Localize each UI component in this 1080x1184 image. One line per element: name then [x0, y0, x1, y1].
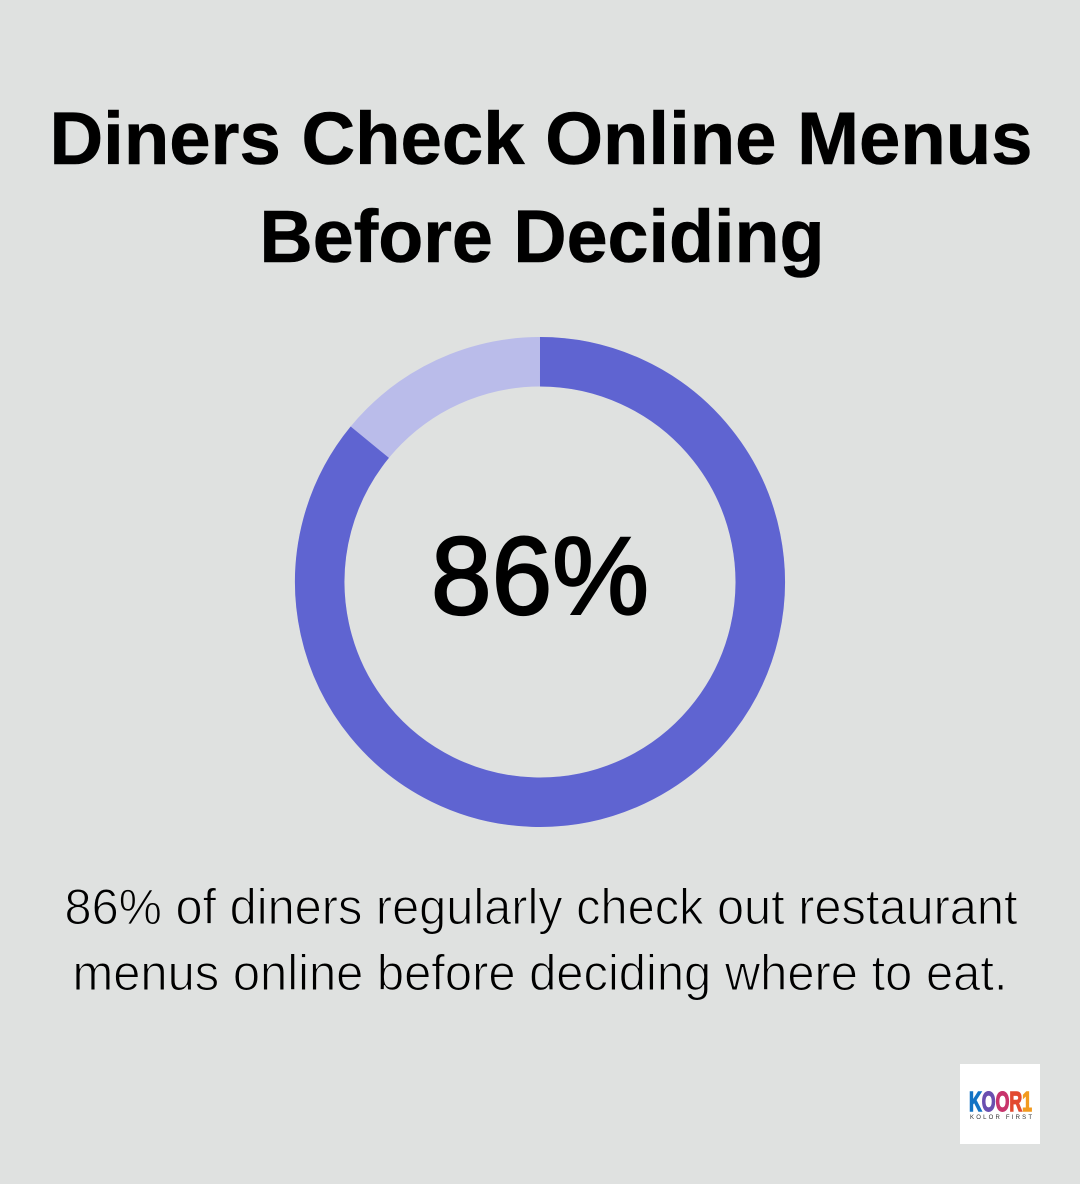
title: Diners Check Online Menus [50, 97, 1032, 180]
description text: menus online before deciding where to eat. [72, 945, 1008, 1001]
logo: Koori Kolor First: KOLOR FIRST [970, 1115, 1032, 1121]
center value: 86%: 86% [431, 515, 649, 638]
title: Before Deciding [260, 195, 824, 278]
description text: 86% of diners regularly check out restaurant [64, 879, 1018, 935]
donut chart: 86% [320, 362, 760, 802]
title [50, 97, 1032, 278]
description text [64, 879, 1018, 1001]
logo: Koori Kolor First [960, 1064, 1040, 1144]
logo: Koori Kolor First: KOOR1 [969, 1086, 1032, 1117]
